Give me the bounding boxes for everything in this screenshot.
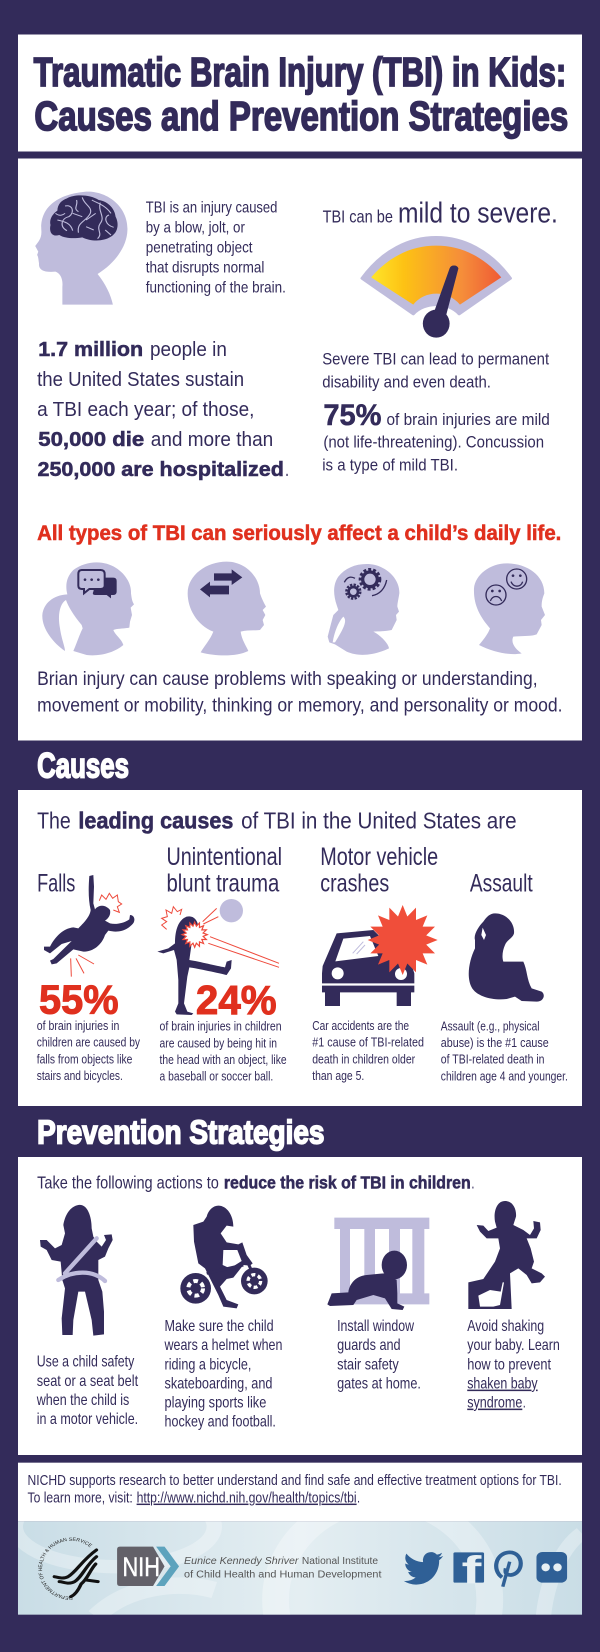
text: TBI definition: that disrupts normal (146, 258, 264, 276)
text: TBI definition: by a blow, jolt, or (146, 218, 245, 236)
icon: facebook: f (461, 1548, 483, 1592)
text: statistics: people in (150, 337, 227, 361)
text: blunt trauma: the head with an object, like (160, 1053, 287, 1067)
text: blunt trauma: of brain injuries in children (160, 1020, 282, 1033)
text: severity facts: (not life-threatening). Concussion (323, 432, 544, 451)
heading: mild to severe: TBI can be (323, 207, 393, 226)
text: statistics: 1.7 million (38, 337, 143, 361)
icon: toddler stepping (468, 1201, 545, 1309)
text: assault: abuse) is the #1 cause (441, 1036, 549, 1050)
icon: twitter (404, 1552, 443, 1585)
text: severity facts: is a type of mild TBI. (322, 455, 458, 474)
text: helmet: Make sure the child (165, 1318, 274, 1335)
text: shaken baby: syndrome (467, 1395, 522, 1411)
icon: boy head with arrows (188, 562, 266, 655)
text: helmet: hockey and football. (165, 1414, 276, 1430)
text: falls: falls from objects like (37, 1052, 132, 1066)
text: statistics: 50,000 die (38, 427, 144, 451)
text: shaken baby: . (523, 1395, 526, 1411)
text: motor vehicle crashes: Car accidents are the (312, 1019, 409, 1033)
heading: cause names: crashes (320, 869, 389, 897)
icon: child head with mood faces (474, 563, 545, 654)
text: NICHD name: National Institute (302, 1556, 378, 1567)
text: TBI definition: TBI is an injury caused (146, 198, 277, 216)
text: window guards: guards and (337, 1337, 401, 1354)
logo: HHS: DEPARTMENT OF HEALTH & HUMAN SERVICES · USA (38, 1538, 92, 1600)
logo: NIH (117, 1547, 179, 1586)
text: seat belt: when the child is (36, 1392, 129, 1409)
icon: severity gauge (362, 237, 510, 338)
text: shaken baby (467, 1318, 560, 1411)
panel: footer (18, 1462, 582, 1615)
text: window guards: gates at home. (337, 1376, 421, 1392)
text: NICHD name (184, 1556, 382, 1580)
text: helmet: wears a helmet when (164, 1337, 282, 1354)
title (34, 50, 568, 139)
text: NICHD note: . (357, 1491, 360, 1506)
text: helmet: skateboarding, and (165, 1376, 272, 1392)
logo: NIH: NIH (122, 1553, 160, 1583)
text: severity facts (322, 349, 550, 474)
footer band (18, 1521, 582, 1615)
icon: flickr (536, 1552, 567, 1583)
heading: cause names: Motor vehicle (320, 843, 438, 871)
text: helmet: riding a bicycle, (165, 1356, 251, 1373)
heading: cause names: Assault (470, 869, 533, 897)
icon: child hit by ball (157, 899, 279, 1015)
text: shaken baby: how to prevent (467, 1356, 551, 1373)
text: leading causes intro (37, 808, 517, 834)
panel: title (18, 34, 582, 152)
text: statistics: a TBI each year; of those, (37, 397, 254, 421)
text: leading causes intro: The (37, 808, 71, 834)
heading: cause names: Falls (37, 869, 75, 897)
text: NICHD name: Eunice Kennedy Shriver (184, 1556, 300, 1567)
icon: baby crawling at gate (327, 1218, 429, 1310)
text: assault (441, 1019, 568, 1083)
text: window guards (337, 1318, 421, 1392)
text: motor vehicle crashes: than age 5. (312, 1069, 364, 1083)
heading: causes: Causes (37, 746, 129, 785)
stat: 55 percent falls: 55% (39, 977, 119, 1023)
text: leading causes intro: leading causes (78, 808, 233, 834)
icon: child on balance bike (180, 1206, 268, 1308)
text: assault: of TBI-related death in (441, 1053, 545, 1066)
heading: mild to severe (323, 197, 558, 229)
heading: prevention strategies: Prevention Strategies (37, 1114, 324, 1151)
text: falls: stairs and bicycles. (37, 1069, 123, 1083)
icon: child with seat belt (40, 1205, 113, 1336)
text: TBI definition: penetrating object (146, 238, 253, 256)
text: motor vehicle crashes: death in children older (312, 1052, 416, 1066)
text: statistics: and more than (151, 427, 273, 451)
icon: girl head with speech bubbles (42, 562, 134, 655)
text: falls (37, 1019, 140, 1083)
text: seat belt: seat or a seat belt (37, 1373, 138, 1390)
text: shaken baby: Avoid shaking (467, 1318, 544, 1335)
text: falls: children are caused by (37, 1036, 140, 1049)
text: severity facts: 75% (323, 398, 382, 431)
heading: cause names: blunt trauma (166, 869, 280, 897)
text: TBI definition: functioning of the brain. (146, 278, 286, 296)
text: brain injury problems (37, 668, 562, 716)
logo: HHS (38, 1538, 100, 1600)
text: severity facts: disability and even death. (322, 372, 491, 391)
text: window guards: Install window (337, 1318, 414, 1335)
icon: girl head with gears (328, 564, 399, 655)
text: window guards: stair safety (337, 1356, 399, 1373)
text: assault: Assault (e.g., physical (441, 1019, 540, 1033)
icon: facebook (453, 1548, 484, 1592)
text: prevention intro: . (471, 1173, 474, 1192)
heading: cause names (37, 843, 533, 897)
text: blunt trauma: a baseball or soccer ball. (160, 1070, 273, 1083)
text: severity facts: of brain injuries are mild (386, 410, 550, 429)
text: NICHD note: To learn more, visit: (28, 1491, 133, 1506)
text: shaken baby: shaken baby (467, 1376, 538, 1392)
text: motor vehicle crashes (312, 1019, 424, 1083)
text: prevention intro: reduce the risk of TBI in children (224, 1173, 471, 1192)
text: statistics: the United States sustain (37, 367, 244, 391)
text: motor vehicle crashes: #1 cause of TBI-related (312, 1036, 424, 1049)
text: prevention intro: Take the following actions to (37, 1173, 219, 1192)
stat: 24 percent blunt trauma: 24% (196, 978, 277, 1023)
text: seat belt: Use a child safety (37, 1354, 135, 1370)
icon: falling child (44, 875, 134, 977)
text: NICHD note: http://www.nichd.nih.gov/health/topics/tbi (137, 1491, 357, 1506)
icon: sitting child (469, 913, 544, 1002)
text: TBI definition (146, 198, 286, 296)
text: shaken baby: your baby. Learn (467, 1337, 560, 1354)
text: helmet (164, 1318, 282, 1430)
text: statistics: . (285, 457, 289, 481)
text: blunt trauma: are caused by being hit in (160, 1036, 277, 1050)
panel: causes (18, 790, 582, 1106)
text: blunt trauma (160, 1020, 287, 1083)
text: seat belt: in a motor vehicle. (37, 1411, 138, 1428)
text: falls: of brain injuries in (37, 1019, 119, 1033)
text: statistics (37, 337, 289, 481)
heading: cause names: Unintentional (166, 843, 282, 871)
icon: pinterest (496, 1552, 521, 1587)
panel: what is TBI (18, 158, 582, 740)
text: seat belt (36, 1354, 138, 1428)
text: NICHD note (28, 1473, 562, 1506)
text: NICHD name: of Child Health and Human Development (184, 1569, 382, 1580)
text: statistics: 250,000 are hospitalized (37, 457, 284, 481)
text: leading causes intro: of TBI in the United States are (241, 808, 517, 834)
icon: child head with brain (35, 192, 127, 305)
text: prevention intro (37, 1173, 474, 1192)
panel: prevention (18, 1157, 582, 1455)
icon: car crash (322, 905, 438, 1006)
text: helmet: playing sports like (165, 1395, 266, 1411)
